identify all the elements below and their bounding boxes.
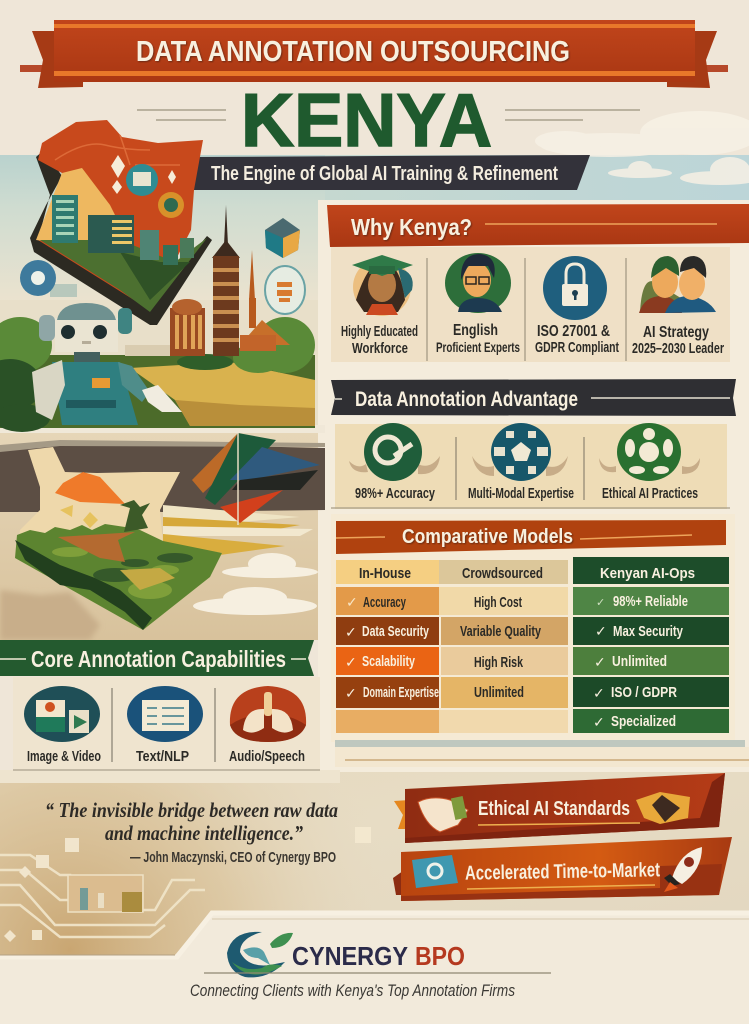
tagline band: The Engine of Global AI Training & Refinement <box>211 163 558 185</box>
icon: data cube <box>265 218 300 258</box>
icon: handshake <box>418 796 468 832</box>
icon: rocket <box>664 847 702 892</box>
column: in-house: Data Security <box>362 623 429 640</box>
item: AI strategy leader: AI Strategy <box>643 324 709 341</box>
logo: Cynergy BPO <box>204 932 551 977</box>
column: Kenyan AI-Ops: ✓ <box>593 686 605 702</box>
title banner <box>20 20 728 88</box>
heading banner <box>327 204 749 247</box>
column: crowdsourced: High Cost <box>474 594 522 611</box>
item: English proficient experts: English <box>453 322 498 339</box>
heading banner: Comparative Models <box>402 526 573 548</box>
icon: data box <box>412 855 458 888</box>
icon: clasped hands <box>636 792 690 824</box>
heading banner: Core Annotation Capabilities <box>31 646 286 672</box>
column: Kenyan AI-Ops: Max Security <box>613 623 683 640</box>
heading: Kenya: KENYA <box>241 78 492 162</box>
column: Kenyan AI-Ops: 98%+ Reliable <box>613 593 688 610</box>
foreground landscape <box>0 317 315 432</box>
item: AI strategy leader <box>632 256 724 357</box>
column: in-house: ✓ <box>345 625 357 641</box>
icon: oval chip <box>265 266 305 314</box>
column: Kenyan AI-Ops: ✓ <box>596 596 605 609</box>
column: Kenyan AI-Ops: ✓ <box>595 624 607 640</box>
yellow streaks <box>163 505 313 555</box>
label: Audio/Speech <box>229 748 305 765</box>
column: Kenyan AI-Ops: ISO / GDPR <box>611 684 677 701</box>
item: ethical AI <box>599 423 700 502</box>
logo: Cynergy BPO: CYNERGY <box>292 941 408 971</box>
ribbon: accelerated time to market: Accelerated Time-to-Market <box>465 859 660 885</box>
heading banner: Data Annotation Advantage <box>355 388 578 411</box>
column: crowdsourced: Crowdsourced <box>462 565 543 582</box>
label: Image & Video <box>27 748 101 765</box>
column: Kenyan AI-Ops <box>573 557 729 733</box>
icon: audio lungs <box>230 686 306 742</box>
item: multi-modal <box>468 423 574 502</box>
heading banner <box>336 520 726 554</box>
column: Kenyan AI-Ops: ✓ <box>593 715 605 731</box>
item: accuracy <box>349 423 440 502</box>
ribbon: accelerated time to market <box>393 837 732 901</box>
panel <box>331 247 730 362</box>
icon: image and video <box>24 686 100 742</box>
ribbon: ethical AI standards <box>394 773 725 843</box>
column: Kenyan AI-Ops: Kenyan AI-Ops <box>600 565 695 582</box>
item: multi-modal: Multi-Modal Expertise <box>468 485 574 502</box>
quote: and machine intelligence.” <box>105 821 303 845</box>
panel <box>331 423 730 509</box>
clouds top right <box>535 111 749 185</box>
ribbon: ethical AI standards: Ethical AI Standards <box>478 798 630 820</box>
logo: Cynergy BPO: BPO <box>415 941 465 971</box>
icon: gear <box>20 260 77 297</box>
tagline band <box>193 155 590 190</box>
panel <box>13 677 320 770</box>
flag fragment <box>192 433 320 525</box>
item: highly educated workforce: Highly Educated <box>341 323 418 340</box>
column: crowdsourced <box>439 560 568 733</box>
tagline: Connecting Clients with Kenya's Top Annotation Firms <box>190 981 515 1000</box>
heading banner: Why Kenya? <box>351 214 472 240</box>
label: Text/NLP <box>136 748 189 765</box>
column: Kenyan AI-Ops: Unlimited <box>612 653 667 670</box>
column: in-house: In-House <box>359 565 411 582</box>
circuit decoration <box>0 827 371 942</box>
quote: “ The invisible bridge between raw data <box>45 798 338 822</box>
column: in-house: Accuracy <box>363 594 406 611</box>
item: ISO and GDPR: GDPR Compliant <box>535 339 619 356</box>
item: ethical AI: Ethical AI Practices <box>602 485 698 502</box>
column: crowdsourced: Variable Quality <box>460 623 541 640</box>
icon: text NLP <box>127 686 203 742</box>
item: ISO and GDPR: ISO 27001 & <box>537 323 610 340</box>
column: Kenyan AI-Ops: Specialized <box>611 713 676 730</box>
illustration: Kenya landscape map <box>0 433 325 640</box>
column: Kenyan AI-Ops: ✓ <box>594 655 606 671</box>
tower and buildings <box>125 205 290 356</box>
item: English proficient experts <box>436 253 520 355</box>
column: in-house <box>336 560 439 733</box>
title banner: DATA ANNOTATION OUTSOURCING <box>136 36 570 68</box>
item: highly educated workforce: Workforce <box>352 340 408 357</box>
table: comparison <box>336 557 729 733</box>
quote <box>45 798 338 866</box>
column: in-house: ✓ <box>345 686 357 702</box>
map of Kenya with city <box>30 120 212 325</box>
column: in-house: Domain Expertise <box>363 684 439 701</box>
section: core annotation capabilities <box>0 640 320 770</box>
section: comparative models <box>331 514 749 767</box>
item: English proficient experts: Proficient Experts <box>436 339 520 355</box>
heading banner <box>331 379 736 416</box>
column: crowdsourced: High Risk <box>474 654 523 671</box>
quote: — John Maczynski, CEO of Cynergy BPO <box>130 849 336 866</box>
robot <box>32 303 182 425</box>
item: ISO and GDPR <box>535 256 619 356</box>
section: why Kenya <box>327 204 749 362</box>
item: highly educated workforce <box>341 255 418 357</box>
illustration: Kenya skyline and robot <box>0 120 315 432</box>
column: in-house: Scalability <box>362 653 415 670</box>
logo mark <box>227 932 293 977</box>
map shape <box>15 447 222 630</box>
column: in-house: ✓ <box>346 595 358 611</box>
column: in-house: ✓ <box>345 655 357 671</box>
column: crowdsourced: Unlimited <box>474 684 524 701</box>
footer divider <box>0 913 749 957</box>
section: data annotation advantage <box>331 379 736 509</box>
item: accuracy: 98%+ Accuracy <box>355 485 435 502</box>
heading banner <box>0 640 314 676</box>
